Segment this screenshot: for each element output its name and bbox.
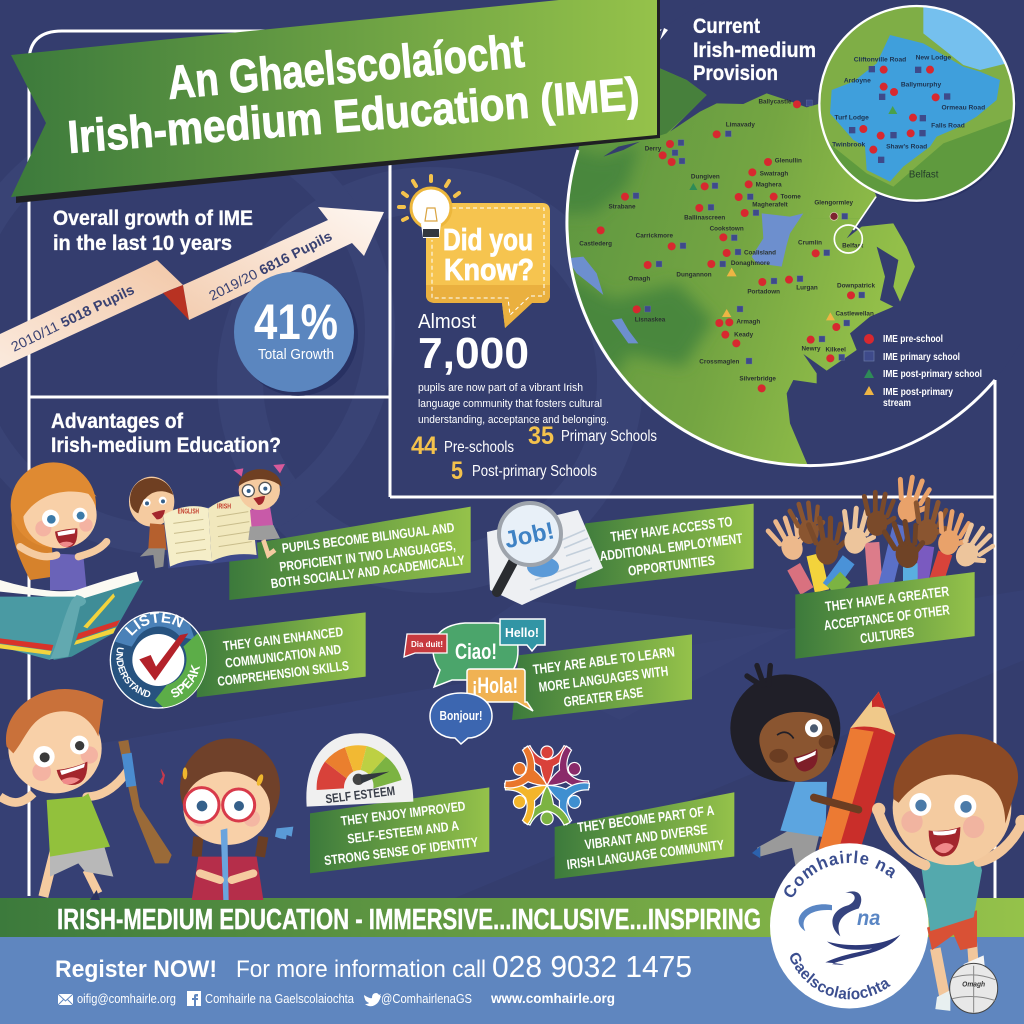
did you know text <box>418 311 609 426</box>
map place labels: Belfast <box>842 243 864 250</box>
callout: community: VIBRANT AND DIVERSE <box>584 822 708 852</box>
callout: community: IRISH LANGUAGE COMMUNITY <box>566 837 725 872</box>
inset labels: Belfast <box>909 170 939 181</box>
heading: current provision: Irish-medium <box>693 39 816 62</box>
heading: current provision <box>693 15 816 85</box>
map land circle <box>568 30 915 464</box>
callout: bilingual <box>229 507 471 600</box>
inset labels: Falls Road <box>931 122 965 129</box>
illustration: children with dictionary <box>129 464 285 568</box>
advantages heading: Irish-medium Education? <box>51 434 281 457</box>
callout: community: THEY BECOME PART OF A <box>577 803 715 835</box>
map: Irish-medium provision <box>565 28 995 468</box>
inset labels: Twinbrook <box>832 141 866 148</box>
map legend <box>864 333 982 409</box>
icon: listen understand speak badge: UNDERSTAND <box>116 648 150 698</box>
bubble: Hola: ¡Hola! <box>472 673 518 698</box>
callout: cultures: CULTURES <box>859 624 915 646</box>
callout: community <box>555 792 734 879</box>
illustration: boy with hurley <box>0 689 172 900</box>
map place labels: Ballycastle <box>758 99 792 106</box>
map place labels: Lisnaskea <box>635 317 666 324</box>
map place labels: Carrickmore <box>636 233 673 240</box>
map place labels: Toome <box>781 194 801 201</box>
callout: self-esteem <box>310 787 489 873</box>
inset markers <box>859 66 940 154</box>
callout: bilingual: PROFICIENT IN TWO LANGUAGES, <box>279 538 456 574</box>
inset labels: New Lodge <box>916 54 951 61</box>
contact information: www.comhairle.org <box>490 990 615 1006</box>
callout: languages: THEY ARE ABLE TO LEARN <box>532 644 675 677</box>
logo: Comhairle na Gaelscolaíochta: Comhairle na <box>784 850 895 898</box>
callout: self-esteem: STRONG SENSE OF IDENTITY <box>323 834 479 868</box>
map place labels: Cookstown <box>710 226 744 233</box>
map legend: stream <box>883 397 911 409</box>
icon: job newspaper and magnifier <box>487 503 603 605</box>
map place labels: Armagh <box>736 319 760 326</box>
footer strip <box>0 898 1024 1024</box>
callout: bilingual: PUPILS BECOME BILINGUAL AND <box>281 520 456 556</box>
school counts: Pre-schools <box>444 439 514 456</box>
bubble: Hello <box>500 619 545 651</box>
map place labels: Glengormley <box>814 200 853 207</box>
did you know text: pupils are now part of a vibrant Irish <box>418 382 583 394</box>
icon: listen understand speak badge: LISTEN <box>124 612 184 636</box>
bubble: Hola <box>467 669 533 711</box>
inset labels: Cliftonville Road <box>854 56 906 63</box>
contact information: @ComhairlenaGS <box>381 991 472 1006</box>
map place labels <box>579 99 875 383</box>
did you know bubble: Did you <box>443 222 533 257</box>
bubble: Ciao: Ciao! <box>455 639 497 664</box>
illustration: boy with gaelic football: Omagh <box>962 982 985 989</box>
contact information: For more information call <box>236 956 486 983</box>
map place labels: Ballinascreen <box>684 215 725 222</box>
school counts: Primary Schools <box>561 428 657 445</box>
contact information: Comhairle na Gaelscolaiochta <box>205 991 355 1006</box>
advantages heading: Advantages of <box>51 410 184 433</box>
heading: current provision: Current <box>693 15 760 38</box>
illustration: raised hands <box>762 471 1003 591</box>
growth heading: in the last 10 years <box>53 232 232 255</box>
callout: languages <box>512 634 692 720</box>
map legend: IME primary school <box>883 351 960 363</box>
bubble: Ciao <box>433 623 518 687</box>
map legend: IME post-primary <box>883 386 953 398</box>
map place labels: Keady <box>734 332 754 339</box>
illustration: children with dictionary: IRISH <box>217 502 231 511</box>
map place labels: Donaghmore <box>731 260 770 267</box>
logo: Comhairle na Gaelscolaíochta: Gaelscolaíochta <box>790 952 891 1000</box>
callout: cultures: ACCEPTANCE OF OTHER <box>823 602 951 633</box>
icon: self esteem gauge <box>306 733 413 807</box>
map place labels: Kilkeel <box>825 346 846 353</box>
school counts: 44 <box>411 432 437 460</box>
callout: self-esteem: SELF-ESTEEM AND A <box>346 818 460 846</box>
logo: Comhairle na Gaelscolaíochta: na <box>857 908 880 930</box>
school counts: Post-primary Schools <box>472 463 597 480</box>
callout: languages: GREATER EASE <box>563 685 644 710</box>
map place labels: Crossmaglen <box>699 359 740 366</box>
illustration: big teal book <box>0 572 143 660</box>
map place labels: Silverbridge <box>739 376 776 383</box>
map place labels: Limavady <box>726 122 755 129</box>
icon: facebook <box>187 991 201 1006</box>
logo: Comhairle na Gaelscolaíochta <box>770 843 929 1008</box>
contact information: 028 9032 1475 <box>492 949 692 984</box>
left section illustrations and benefits <box>0 462 525 900</box>
growth stat circle <box>234 272 358 396</box>
contact information <box>55 949 692 1006</box>
icon: self esteem gauge: SELF ESTEEM <box>325 784 396 806</box>
did you know text: understanding, acceptance and belonging. <box>418 414 609 426</box>
growth arrow <box>0 207 384 368</box>
inset labels <box>832 54 985 181</box>
growth stat circle: Total Growth <box>258 346 334 363</box>
did you know bubble <box>399 176 550 328</box>
inset labels: Ardoyne <box>844 77 871 84</box>
icon: community figures <box>503 745 591 826</box>
map place labels: Downpatrick <box>837 283 875 290</box>
bubble: Bonjour: Bonjour! <box>440 708 482 723</box>
callout: languages: MORE LANGUAGES WITH <box>538 663 669 695</box>
callout: employment: ADDITIONAL EMPLOYMENT <box>599 530 744 564</box>
heading: current provision: Provision <box>693 62 778 85</box>
inset labels: Shaw's Road <box>886 143 927 150</box>
map place labels: Coalisland <box>744 250 776 257</box>
map place labels: Castlewellan <box>835 311 874 318</box>
inset labels: Ormeau Road <box>942 104 985 111</box>
growth heading: Overall growth of IME <box>53 207 253 230</box>
illustration: boy with gaelic football <box>872 734 1024 1013</box>
inset map: Belfast <box>817 3 1020 253</box>
map place labels: Crumlin <box>798 240 822 247</box>
did you know text: Almost <box>418 311 476 333</box>
map place labels: Castlederg <box>579 241 612 248</box>
callout: communication: COMPREHENSION SKILLS <box>217 658 350 689</box>
map place labels: Swatragh <box>760 171 788 178</box>
callout: employment <box>575 504 754 589</box>
inset labels: Turf Lodge <box>835 114 869 121</box>
right section illustrations and benefits <box>462 474 1024 1014</box>
Lough Erne <box>571 256 604 295</box>
bubble: Dia duit <box>404 634 447 657</box>
bubble: Hello: Hello! <box>505 625 539 640</box>
did you know text: language community that fosters cultural <box>418 398 602 410</box>
map markers <box>597 100 855 392</box>
map place labels: Newry <box>801 346 821 353</box>
map place labels: Glenullin <box>775 158 802 165</box>
growth stat circle: 41% <box>254 294 338 350</box>
contact information: oifig@comhairle.org <box>77 991 176 1006</box>
callout: employment: OPPORTUNITIES <box>627 553 716 579</box>
inset labels: Ballymurphy <box>901 81 941 88</box>
map legend: IME pre-school <box>883 333 943 345</box>
contact information: Register NOW! <box>55 956 217 983</box>
callout: communication: COMMUNICATION AND <box>224 642 342 671</box>
map place labels: Omagh <box>628 276 650 283</box>
school counts: 35 <box>528 422 554 450</box>
growth arrow: 2019/20 6816 Pupils <box>206 228 335 304</box>
callout: communication: THEY GAIN ENHANCED <box>222 624 344 654</box>
callout: employment: THEY HAVE ACCESS TO <box>610 514 733 545</box>
map place labels: Dungannon <box>676 272 712 279</box>
map place labels: Strabane <box>608 204 636 211</box>
callout: self-esteem: THEY ENJOY IMPROVED <box>340 798 467 829</box>
bubble: Dia duit: Dia duit! <box>411 639 443 649</box>
school counts <box>411 422 657 485</box>
did you know bubble: Know? <box>444 252 534 287</box>
growth arrow: 2010/11 5018 Pupils <box>8 281 137 355</box>
map place labels: Magherafelt <box>752 202 789 209</box>
icon: listen understand speak badge: SPEAK <box>171 664 200 698</box>
icon: email <box>58 994 73 1005</box>
title text <box>66 24 641 163</box>
map circle outline <box>567 28 995 466</box>
map place labels: Lurgan <box>796 285 818 292</box>
bubble: Bonjour <box>430 693 492 744</box>
callout: communication <box>197 612 366 697</box>
language speech bubbles <box>404 619 545 744</box>
callout: cultures: THEY HAVE A GREATER <box>824 583 950 614</box>
advantages heading <box>51 410 281 457</box>
map place labels: Portadown <box>747 289 780 296</box>
Lough Neagh <box>752 213 803 267</box>
callout: cultures <box>795 572 975 659</box>
illustration: girl on book <box>11 462 107 590</box>
did you know text: 7,000 <box>418 329 529 378</box>
callout: bilingual: BOTH SOCIALLY AND ACADEMICALLY <box>270 553 466 591</box>
icon: light bulb <box>399 176 459 238</box>
footer strip: IRISH-MEDIUM EDUCATION - IMMERSIVE...INCLUSIVE...INSPIRING <box>57 904 761 936</box>
school counts: 5 <box>451 457 463 485</box>
title banner <box>11 0 660 203</box>
illustration: boy with pencil <box>730 666 895 865</box>
growth heading <box>53 207 253 255</box>
icon: listen understand speak badge <box>110 611 207 709</box>
illustration: girl with recorder <box>159 738 293 900</box>
title text: Irish-medium Education (IME) <box>66 67 641 163</box>
illustration: children with dictionary: ENGLISH <box>178 506 199 515</box>
icon: twitter <box>364 993 381 1006</box>
map place labels: Dungiven <box>691 174 720 181</box>
map place labels: Derry <box>645 146 662 153</box>
map legend: IME post-primary school <box>883 368 982 380</box>
icon: job newspaper and magnifier: Job! <box>502 517 557 554</box>
title text: An Ghaelscolaíocht <box>165 24 527 109</box>
map place labels: Maghera <box>756 182 782 189</box>
